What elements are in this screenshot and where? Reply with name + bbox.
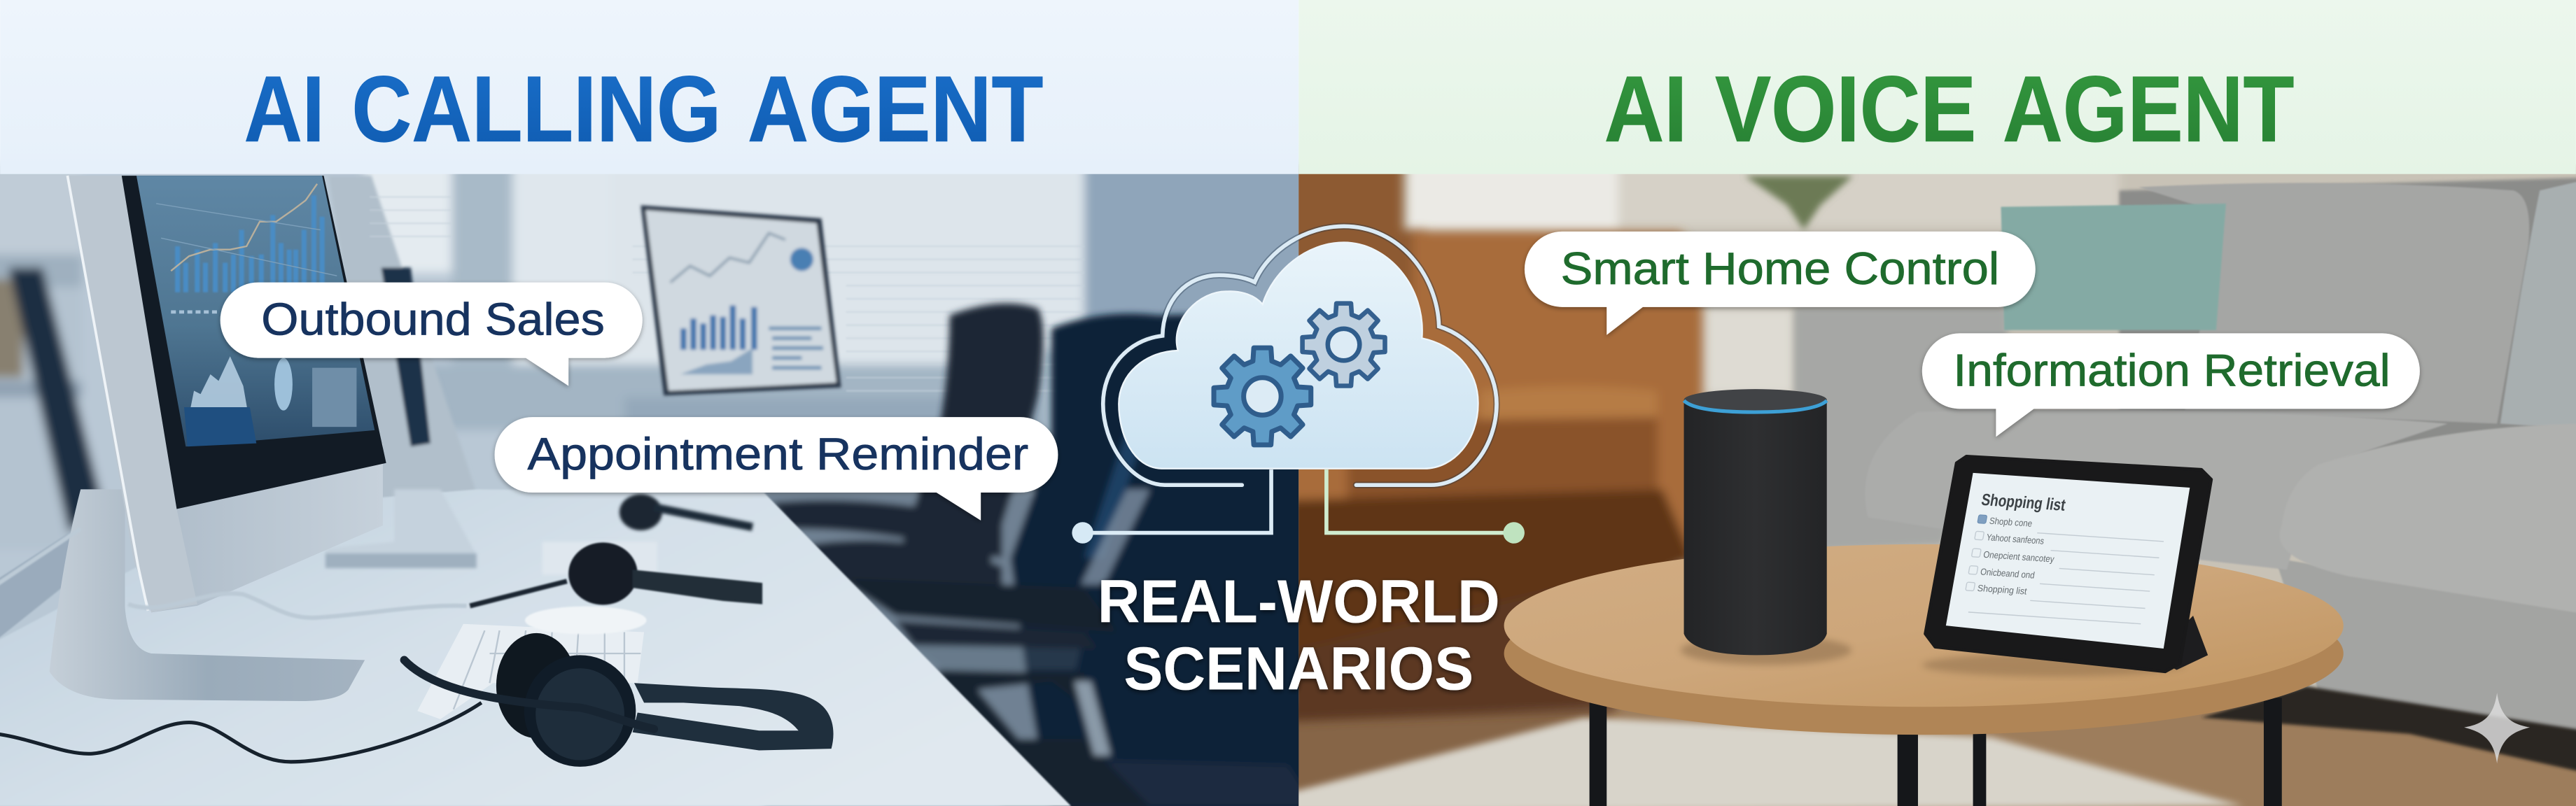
sofa right cushion (2500, 177, 2576, 430)
checked box (1977, 515, 1987, 523)
tablet shadow (1922, 653, 2185, 677)
sofa seat right (2280, 423, 2576, 616)
chair highlight (1084, 394, 1156, 558)
sofa back fill (2117, 176, 2576, 453)
screen grid (312, 368, 356, 427)
table top (1504, 544, 2344, 707)
headset microphone (404, 660, 654, 729)
table edge (1504, 572, 2344, 735)
monitor screen (136, 176, 374, 446)
connector right (1326, 469, 1525, 544)
far headset (620, 494, 752, 530)
wall chart area (680, 348, 752, 374)
word AGENT: AGENT (2003, 57, 2294, 162)
desk surface (0, 489, 1071, 806)
screen mountain base (184, 407, 256, 446)
gear large (1214, 348, 1311, 445)
word AGENT: AGENT (748, 57, 1043, 162)
second monitor (329, 176, 477, 529)
list item three: Onepcient sancotey (1982, 549, 2055, 565)
front headset (0, 633, 834, 767)
office background (0, 164, 1315, 806)
near monitor (0, 176, 386, 701)
word CALLING: CALLING (351, 57, 721, 162)
list item five: Shopping list (1977, 583, 2028, 597)
sofa base (2275, 558, 2576, 735)
list item two: Yahoot sanfeons (1986, 532, 2045, 546)
shopping list (1961, 491, 2170, 624)
sofa left back (1794, 307, 2008, 551)
table legs (1590, 698, 2282, 806)
heading: AI Calling Agent (244, 57, 1043, 162)
tablet (1922, 456, 2211, 677)
keyboard (417, 624, 644, 719)
speaker body (1684, 401, 1827, 655)
middle headset (470, 542, 762, 606)
screen bar chart (178, 195, 322, 292)
word AI: AI (1604, 57, 1687, 162)
icon: sparkle watermark (2464, 693, 2530, 763)
list title: Shopping list (1980, 491, 2067, 515)
near chair (1010, 312, 1315, 806)
bezel white edge (67, 176, 148, 611)
speaker top (1684, 389, 1827, 411)
callout: Smart Home Control (1525, 232, 2036, 335)
wall chart pie (790, 248, 813, 271)
panel: left header band (0, 0, 1298, 174)
list item one: Shopb cone (1989, 516, 2033, 529)
headset band (633, 683, 834, 750)
sofa shadow (2202, 686, 2576, 775)
sofa back cushion (2139, 183, 2529, 423)
wall chart line (671, 233, 785, 283)
callout: Information Retrieval (1922, 333, 2420, 437)
bubble label: Outbound Sales (261, 295, 605, 345)
icon: cloud with gears (1072, 226, 1525, 544)
screen grid lines (156, 204, 337, 276)
gear small (1303, 304, 1385, 386)
list item four: Onicbeand ond (1980, 567, 2036, 581)
second monitor foot (326, 489, 477, 568)
keyboard far part (542, 542, 657, 574)
bubble label: Information Retrieval (1953, 345, 2390, 395)
screen pie (274, 358, 293, 411)
panel: right living room scene (1265, 164, 2576, 806)
left grey wedge (0, 529, 99, 644)
chairs and floor (764, 304, 1315, 806)
panel: right header band (1298, 0, 2576, 174)
wall chart bars (683, 305, 754, 350)
tablet screen (1946, 473, 2190, 649)
screen small label row (171, 311, 220, 313)
rule lines and boxes (1961, 529, 2164, 624)
callout: Outbound Sales (220, 283, 643, 386)
bubble shape (495, 417, 1058, 521)
heading: AI Voice Agent (1604, 57, 2294, 162)
screen line chart (171, 184, 317, 271)
bubble label: Appointment Reminder (527, 429, 1028, 479)
speaker light ring (1684, 401, 1827, 412)
speaker shadow (1681, 635, 1851, 665)
bubble shape (1922, 333, 2420, 437)
wall monitor with charts (640, 205, 841, 396)
chair base (1018, 758, 1315, 806)
connector left (1072, 469, 1271, 544)
bubble shape (1525, 232, 2036, 335)
living room background (1282, 164, 2576, 806)
word AI: AI (244, 57, 325, 162)
bubble label: Smart Home Control (1561, 243, 1999, 294)
sofa seat left (1985, 409, 2446, 570)
headset back earcup (496, 633, 577, 738)
armchair (1265, 164, 1702, 723)
rug (1282, 718, 2244, 806)
floor (764, 493, 1315, 806)
plant (1744, 176, 1853, 230)
monitor bezel (67, 176, 197, 612)
cloud outer outline (1103, 226, 1497, 485)
tablet stand (2152, 616, 2208, 670)
headset front earcup (524, 655, 636, 767)
heading line two: SCENARIOS (1124, 635, 1474, 703)
heading line one: REAL-WORLD (1098, 567, 1500, 635)
screen mountain chart (188, 356, 250, 423)
chair pole (1081, 489, 1150, 584)
far chair trunk (900, 304, 1043, 578)
monitor back panel (151, 444, 383, 612)
wall chart rows (769, 328, 823, 368)
cloud body (1119, 243, 1478, 469)
cloud outline shadow (1103, 226, 1497, 485)
teal pillow (2001, 204, 2226, 330)
headset cable (0, 702, 482, 762)
sofa (1794, 177, 2576, 775)
bubble shape (220, 283, 643, 386)
heading: Real-World Scenarios (1098, 567, 1500, 703)
monitor glass (122, 176, 386, 509)
mouse (525, 607, 647, 635)
word VOICE: VOICE (1715, 57, 1976, 162)
speaker (1684, 389, 1827, 655)
callout: Appointment Reminder (495, 417, 1058, 521)
cables light (0, 529, 467, 618)
chair dark bands (772, 500, 1002, 558)
window blinds (370, 197, 1084, 391)
monitor stand (50, 489, 365, 701)
tablet frame (1926, 456, 2211, 672)
panel: left office scene (0, 164, 1315, 806)
